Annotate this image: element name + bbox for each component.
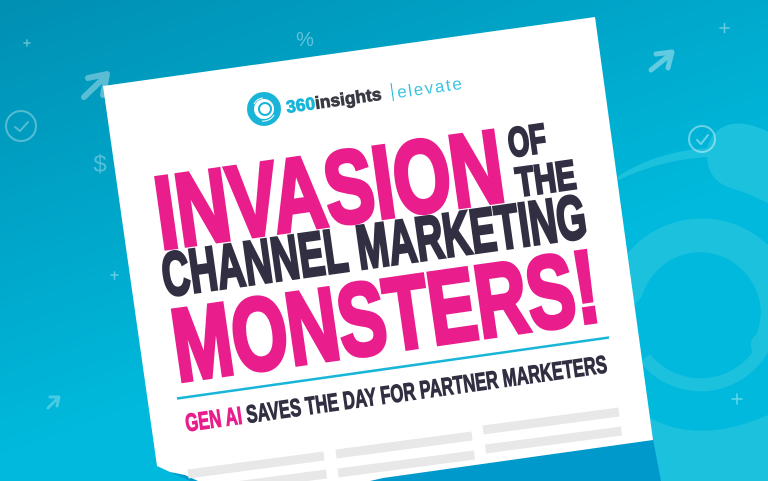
subtitle: GEN AI: GEN AI (183, 402, 244, 437)
logo wordmark: 360insights (285, 84, 383, 117)
icon: check circle left (6, 111, 36, 141)
divider rule (177, 338, 609, 398)
icon: plus marks (24, 24, 742, 404)
placeholder text bars (188, 412, 622, 481)
icon: check circle right (689, 126, 715, 152)
decorative icons (6, 24, 742, 408)
title (148, 108, 606, 403)
icon: percent sign: % (296, 29, 314, 51)
paper sheet (103, 17, 653, 481)
subtitle (183, 351, 609, 437)
title: THE: THE (513, 152, 579, 205)
logo (250, 74, 463, 122)
logo elevate: elevate (396, 74, 463, 102)
background logo watermark (617, 124, 768, 481)
title: OF: OF (505, 115, 549, 166)
icon: large arrow left (84, 74, 107, 97)
logo divider (391, 83, 394, 101)
logo mark (250, 96, 278, 122)
icon: small arrow (48, 397, 59, 408)
icon: dollar sign: $ (93, 151, 107, 178)
icon: arrow right (651, 52, 672, 70)
second page below paper (157, 439, 661, 481)
title: INVASION: INVASION (148, 108, 511, 271)
